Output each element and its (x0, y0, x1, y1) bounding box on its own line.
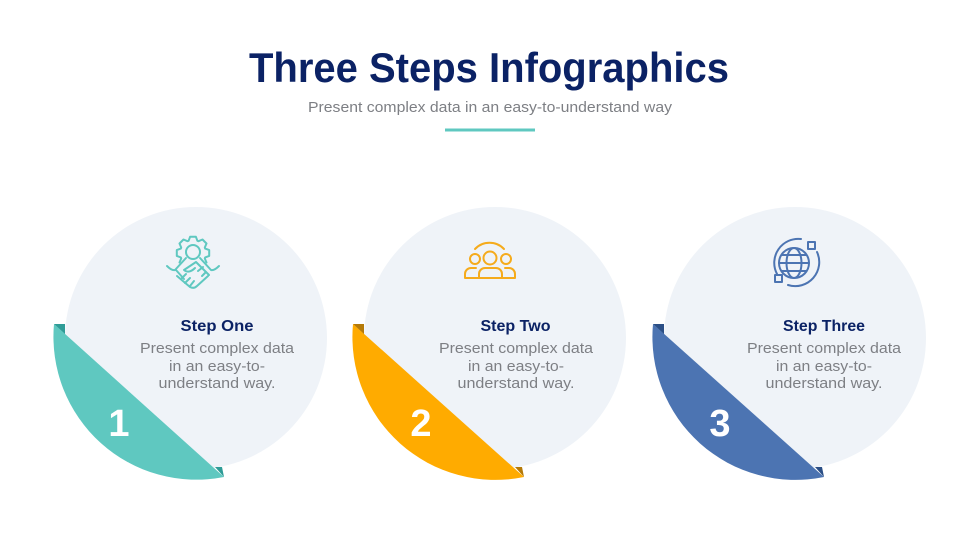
panel: step one (53, 207, 327, 480)
fold bottom (515, 467, 524, 477)
fold top (353, 324, 364, 334)
panel: step two: in an easy-to- (468, 358, 564, 375)
number: 3 (709, 403, 731, 445)
background circle (364, 207, 626, 469)
segment (53, 324, 224, 480)
subtitle: Present complex data in an easy-to-understand way (308, 99, 673, 116)
fold top (653, 324, 664, 334)
number: 1 (108, 403, 130, 445)
fold bottom (215, 467, 224, 477)
title: Three Steps Infographics (249, 44, 729, 91)
fold top (54, 324, 65, 334)
panel: step one: in an easy-to- (169, 358, 265, 375)
panel: step three (652, 207, 926, 480)
body text: Present complex data (439, 340, 594, 357)
icon: globe (774, 239, 819, 286)
body text: Present complex data (140, 340, 295, 357)
panel: step three: understand way. (766, 375, 882, 392)
background circle (65, 207, 327, 469)
segment (652, 324, 824, 480)
panel: step one: understand way. (158, 375, 276, 392)
heading: Step Two (480, 318, 551, 335)
number: 2 (410, 403, 432, 445)
body text: Present complex data (747, 340, 902, 357)
icon: team (465, 243, 515, 278)
background circle (664, 207, 926, 469)
icon: handshake and gear (167, 237, 219, 288)
heading: Step One (180, 318, 254, 335)
fold bottom (815, 467, 824, 477)
title underline (445, 128, 535, 132)
panel: step three: in an easy-to- (776, 358, 872, 375)
panel: step two (352, 207, 626, 480)
panel: step two: understand way. (458, 375, 574, 392)
heading: Step Three (783, 318, 865, 335)
segment (352, 324, 524, 480)
